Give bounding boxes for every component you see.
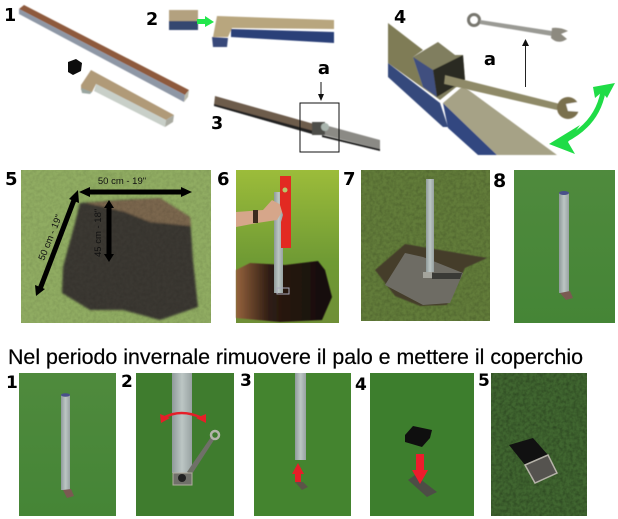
arrow: thin upward <box>522 39 529 87</box>
post <box>426 179 434 272</box>
number 4: 4 <box>394 8 406 28</box>
assembled rod <box>214 96 380 151</box>
arrow: depth <box>104 200 114 262</box>
post <box>274 192 283 293</box>
label: depth: 45 cm - 18" <box>93 209 104 257</box>
winter step 3 <box>240 371 351 516</box>
label: width: 50 cm - 19" <box>98 176 146 187</box>
post photo <box>388 23 557 155</box>
grass photo <box>361 170 490 321</box>
arrow: down to box <box>318 82 324 101</box>
post base <box>173 473 192 485</box>
winter step 1 <box>6 373 116 516</box>
lid open <box>509 438 548 465</box>
grass photo <box>19 373 116 516</box>
icon: black cap <box>68 59 82 75</box>
icon: black cap <box>405 426 432 447</box>
arrow: red up <box>292 463 304 482</box>
number 5: 5 <box>5 169 18 190</box>
heading: Nel periodo invernale rimuovere il palo e mettere il coperchio <box>8 345 583 369</box>
post <box>172 373 192 473</box>
short bracket <box>81 70 174 127</box>
icon: wrench in use <box>444 75 584 119</box>
post <box>61 395 70 490</box>
step 4: wrench detail <box>388 8 615 155</box>
level vial <box>282 188 288 192</box>
long rod <box>19 5 189 102</box>
winter step 2 <box>121 372 234 516</box>
grass photo <box>370 373 474 516</box>
step 8: finished post <box>493 170 615 323</box>
grass photo <box>491 373 587 516</box>
base <box>295 482 308 490</box>
lid frame <box>525 455 557 483</box>
wrench <box>187 431 219 474</box>
post shadow <box>432 273 462 279</box>
arm and hand <box>236 200 285 227</box>
number 5: 5 <box>478 371 490 391</box>
arrow: red down <box>412 454 428 484</box>
hole <box>62 198 198 320</box>
icon: wrench <box>468 14 568 42</box>
grass shade <box>361 170 490 321</box>
step 7: concrete <box>343 169 490 321</box>
step 6: levelling <box>217 169 339 323</box>
number 1: 1 <box>4 6 16 26</box>
step 5: hole photo <box>5 169 211 323</box>
arrow: red rotate <box>160 413 206 423</box>
base <box>408 475 437 497</box>
bracket <box>212 16 334 47</box>
number 1: 1 <box>6 373 18 393</box>
grass photo <box>514 170 615 323</box>
post top <box>61 393 70 397</box>
step 1: rod, cap and bracket <box>4 5 189 127</box>
arrow: green insert <box>197 16 214 27</box>
post top <box>559 191 569 195</box>
post base <box>63 489 74 498</box>
number 3: 3 <box>211 114 223 134</box>
step 3: assembled rod <box>211 58 380 152</box>
red level <box>280 176 291 248</box>
post foot <box>423 272 432 278</box>
winter step 4 <box>355 373 474 516</box>
grass photo <box>254 373 351 516</box>
number 3: 3 <box>240 371 252 391</box>
grass photo <box>236 170 339 323</box>
post <box>559 193 569 293</box>
number 7: 7 <box>343 169 356 190</box>
number 2: 2 <box>146 10 158 30</box>
callout box a <box>300 103 339 152</box>
rod end <box>169 10 198 30</box>
number 8: 8 <box>493 170 506 192</box>
number 4: 4 <box>355 375 367 395</box>
arrow: green curved <box>549 83 615 154</box>
post <box>295 373 306 460</box>
post base <box>560 291 573 300</box>
grass photo <box>21 170 211 323</box>
arrow: width <box>79 187 192 197</box>
number 6: 6 <box>217 169 230 190</box>
label: length: 50 cm - 19" <box>37 213 65 262</box>
hole <box>236 261 332 322</box>
base plate <box>277 288 289 294</box>
muddy edge <box>375 244 487 306</box>
label a: a <box>318 58 330 79</box>
arrow: length <box>35 190 79 296</box>
number 2: 2 <box>121 372 133 392</box>
step 2: insert rod <box>146 10 334 47</box>
label a: a <box>484 49 496 70</box>
concrete <box>385 253 463 305</box>
winter step 5 <box>478 371 587 516</box>
grass photo <box>136 373 234 516</box>
